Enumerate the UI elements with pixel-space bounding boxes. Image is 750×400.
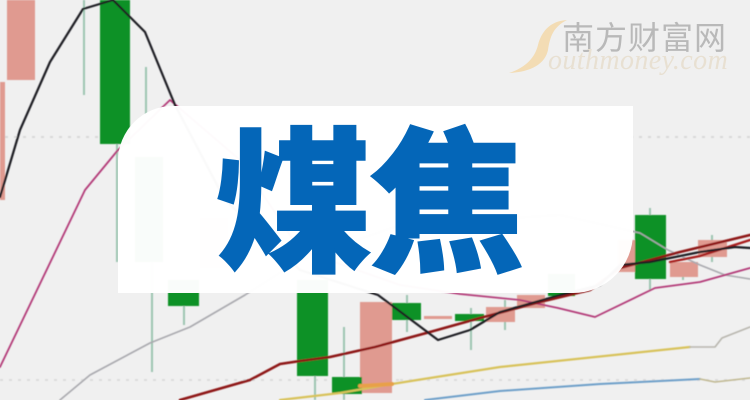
logo Chinese name: 南方财富网 [562, 20, 727, 56]
logo: southmoney watermark [510, 20, 728, 76]
title: 煤焦 [216, 119, 522, 293]
logo URL: outhmoney.com [548, 45, 728, 76]
panel: title card [118, 106, 633, 293]
green candles [100, 0, 666, 394]
icon: S swoosh [510, 20, 567, 73]
